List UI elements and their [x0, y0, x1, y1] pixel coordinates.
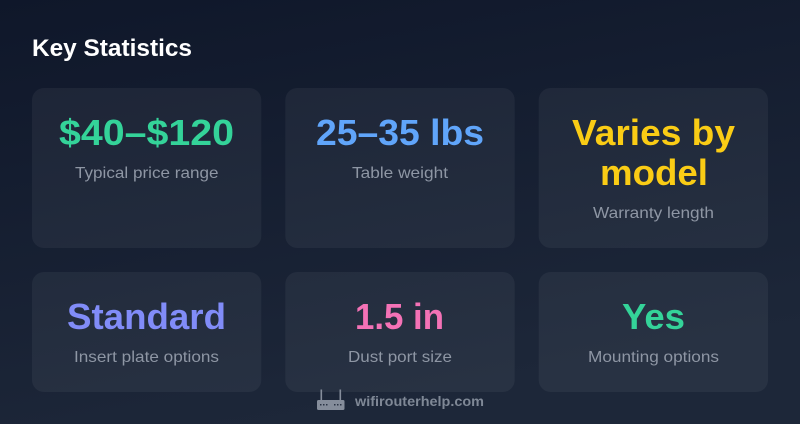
- panel: warranty length: model: [600, 152, 708, 193]
- title: Key Statistics: [32, 35, 192, 62]
- panel: warranty length: Warranty length: [593, 205, 714, 222]
- panel: typical price range: Typical price range: [75, 165, 219, 182]
- panel: insert plate options: [32, 272, 261, 392]
- panel: mounting options: [539, 272, 768, 392]
- panel: mounting options: Yes: [622, 296, 685, 337]
- panel: warranty length: [539, 88, 768, 248]
- footer text: wifirouterhelp.com: [354, 394, 484, 409]
- panel: table weight: Table weight: [352, 165, 449, 182]
- footer: brand: [317, 390, 484, 410]
- panel: dust port size: [285, 272, 515, 392]
- panel: dust port size: Dust port size: [348, 349, 452, 366]
- panel: dust port size: 1.5 in: [355, 296, 444, 337]
- icon: router: [317, 390, 344, 410]
- panel: typical price range: [32, 88, 261, 248]
- panel: typical price range: $40–$120: [59, 112, 234, 153]
- panel: insert plate options: Insert plate options: [74, 349, 219, 366]
- panel: insert plate options: Standard: [67, 296, 226, 337]
- panel: warranty length: Varies by: [572, 112, 735, 153]
- panel: table weight: [285, 88, 515, 248]
- panel: table weight: 25–35 lbs: [316, 112, 484, 153]
- panel: mounting options: Mounting options: [588, 349, 719, 366]
